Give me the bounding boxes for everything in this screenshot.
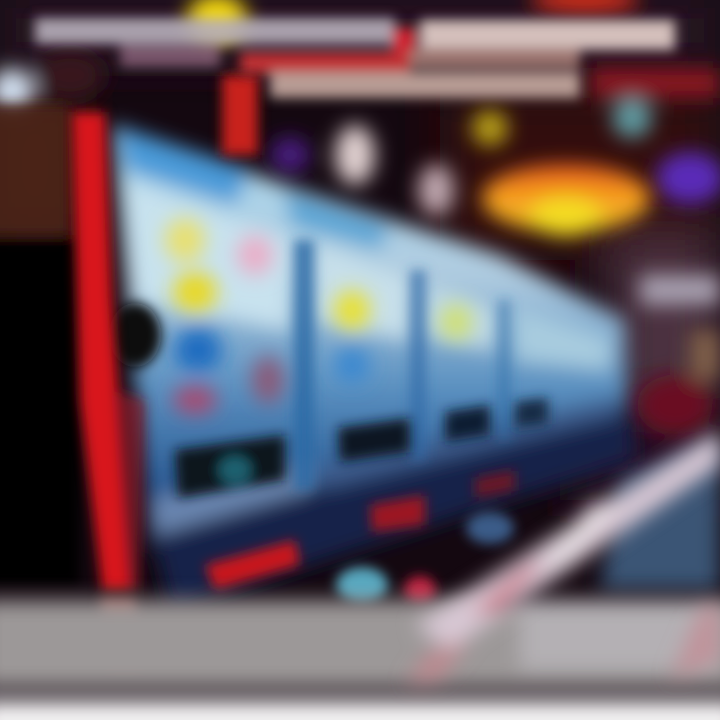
red and white stanchion belt [405, 430, 720, 685]
slot machine row [112, 125, 635, 610]
slot machine dark screens [175, 398, 548, 498]
background lights [0, 0, 720, 216]
black column at left [0, 105, 161, 585]
slot machine reel symbols [165, 218, 472, 414]
background: dark ceiling glow [0, 0, 720, 500]
red rope pole [72, 75, 258, 665]
slot machine red trays [205, 470, 515, 604]
right machines [600, 275, 720, 590]
casino floor [0, 600, 720, 720]
slot machine dividers [294, 240, 510, 490]
title [35, 18, 675, 98]
icon: orange ceiling lamp [482, 164, 650, 236]
